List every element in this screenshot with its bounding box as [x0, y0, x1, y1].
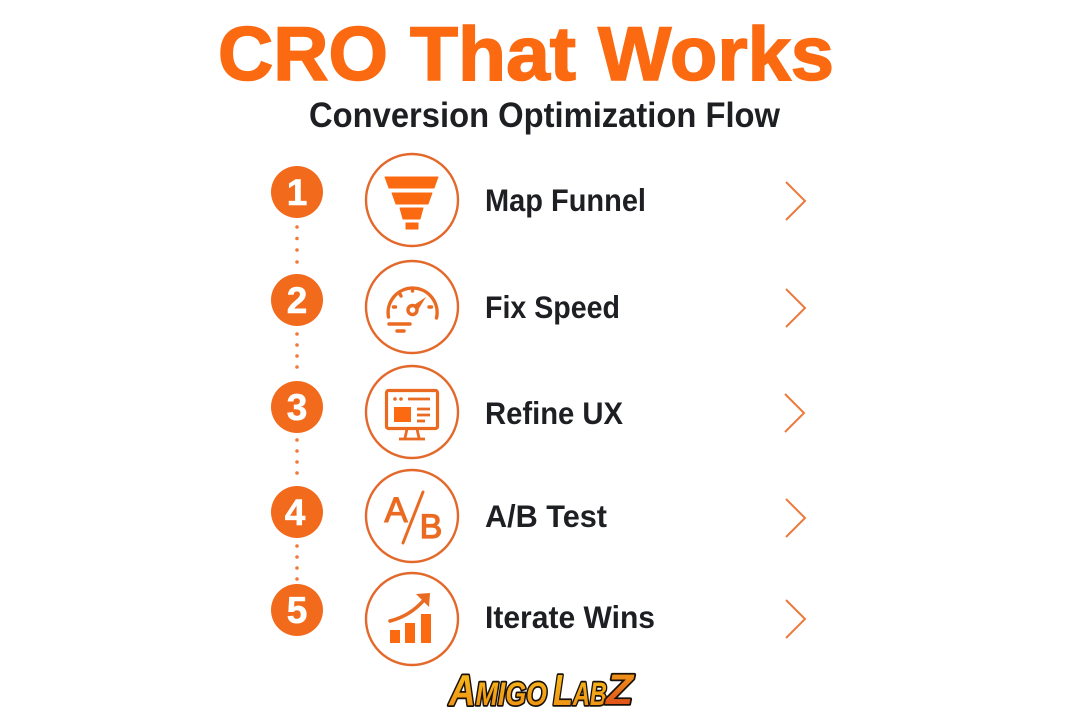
title: CRO	[218, 12, 388, 97]
step 2: fix speed	[271, 261, 805, 353]
icon: monitor	[366, 366, 458, 458]
number badge 4: 4	[285, 492, 306, 533]
icon: rising chart	[366, 573, 458, 665]
number badge 1	[271, 166, 323, 218]
number badge 4	[271, 486, 323, 538]
connector: dotted timeline	[295, 225, 299, 581]
number badge 5	[271, 584, 323, 636]
arrow	[786, 289, 805, 327]
subtitle: Conversion Optimization Flow	[309, 96, 781, 135]
arrow	[785, 394, 804, 432]
arrow	[786, 499, 805, 537]
number badge 5: 5	[287, 590, 307, 631]
icon: a/b	[366, 470, 458, 562]
label: Fix Speed	[485, 289, 620, 325]
number badge 3: 3	[287, 387, 307, 428]
logo: amigo labz: Z	[604, 666, 635, 714]
number badge 3	[271, 381, 323, 433]
step 5: iterate wins	[271, 573, 805, 665]
label: A/B Test	[485, 498, 607, 534]
label: Map Funnel	[485, 182, 646, 218]
number badge 2	[271, 274, 323, 326]
step 4: a/b test	[271, 470, 805, 562]
logo: amigo labz	[448, 666, 635, 715]
title	[218, 12, 834, 97]
icon: speedometer	[366, 261, 458, 353]
title: Works	[598, 12, 834, 97]
label: Refine UX	[485, 395, 623, 431]
icon: a/b: A	[384, 491, 408, 530]
logo: amigo labz: LAB	[553, 666, 607, 715]
number badge 1: 1	[287, 172, 307, 213]
step 3: refine ux	[271, 366, 804, 458]
label: Iterate Wins	[485, 599, 655, 635]
icon: a/b: B	[420, 508, 442, 546]
logo: amigo labz: AMIGO	[448, 666, 547, 715]
icon: funnel	[366, 154, 458, 246]
number badge 2: 2	[287, 280, 307, 321]
title: That	[410, 12, 576, 97]
step 1: map funnel	[271, 154, 805, 246]
arrow	[786, 182, 805, 220]
arrow	[786, 600, 805, 638]
